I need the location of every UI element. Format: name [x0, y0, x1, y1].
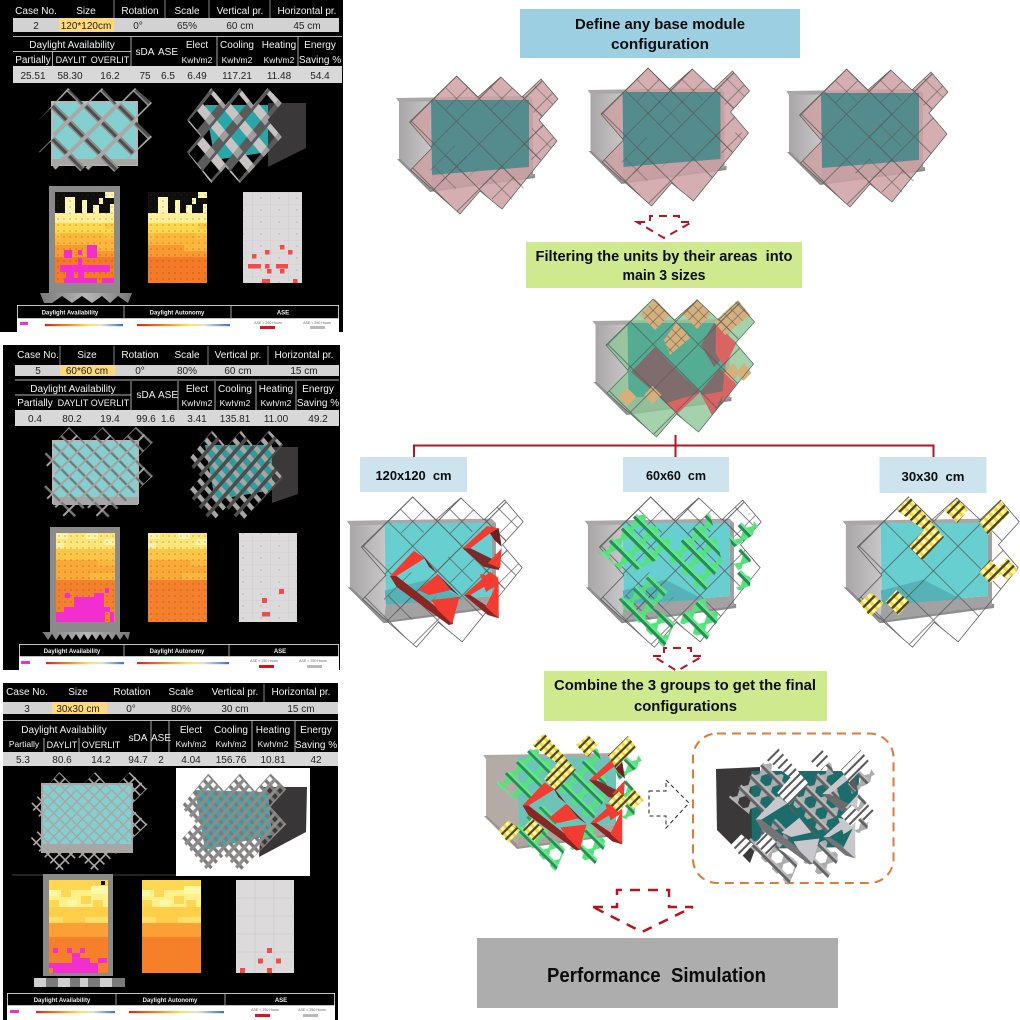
performance table: case 5: ASE: [158, 390, 178, 401]
legend: ASE > 250 Hours: [254, 321, 282, 325]
parameter table: case 3: Vertical pr.: [212, 687, 258, 698]
arrow: black dashed right: [649, 780, 689, 828]
parameter table: case 2: 0°: [133, 21, 143, 32]
performance table: case 3: sDA: [129, 733, 148, 744]
performance table: case 2: OVERLIT: [91, 55, 130, 65]
legend: ASE < 250 Hours: [298, 1008, 326, 1012]
performance table: case 5: 99.6: [136, 414, 156, 425]
performance table: case 3: Partially: [9, 739, 40, 749]
daylight autonomy map: [148, 533, 207, 622]
performance table: case 2: 6.5: [161, 71, 175, 82]
parameter table: case 5: Horizontal pr.: [275, 350, 333, 361]
ASE map: [236, 880, 294, 973]
legend: ASE: [277, 310, 289, 316]
label: 30x30 cm: [880, 457, 986, 493]
performance table: case 5: Kwh/m2: [261, 398, 292, 408]
performance table: case 3: Kwh/m2: [216, 739, 247, 749]
performance table: case 5: Kwh/m2: [182, 398, 213, 408]
performance table: case 2: Cooling: [220, 40, 254, 51]
parameter table: case 2: Size: [76, 6, 96, 17]
performance table: case 3: ASE: [151, 733, 171, 744]
performance table: case 2: 11.48: [267, 71, 292, 82]
performance table: case 3: Elect: [180, 725, 202, 736]
parameter table: case 5: 5: [35, 366, 41, 377]
parameter table: case 2: 65%: [177, 21, 197, 32]
performance table: case 5: Kwh/m2: [220, 398, 251, 408]
heading: combine groups: Combine the 3 groups to get the final: [554, 678, 816, 694]
parameter table: case 5: 80%: [177, 366, 197, 377]
performance table: case 2: 25.51: [20, 71, 46, 82]
performance table: case 3: 94.7: [128, 755, 148, 766]
performance table: case 5: DAYLIT: [58, 398, 89, 408]
parameter table: case 2: Case No.: [15, 6, 57, 17]
daylight availability map: [42, 527, 130, 640]
performance table: case 3: Daylight Availability: [21, 725, 107, 736]
parameter table: case 2: 60 cm: [226, 21, 254, 32]
performance table: case 5: 49.2: [308, 414, 328, 425]
unit group: 120x120 in red: [347, 497, 523, 647]
arrow: dashed down 1: [637, 216, 692, 238]
connector: red tree: [414, 435, 934, 457]
performance table: case 2: DAYLIT: [56, 55, 87, 65]
legend: ASE < 250 Hours: [299, 659, 327, 663]
heading: define base module: [520, 9, 800, 58]
performance table: case 5: 3.41: [187, 414, 207, 425]
final configuration: dashed frame and render: [693, 734, 894, 886]
performance table: case 2: Kwh/m2: [182, 55, 213, 65]
performance table: case 5: 11.00: [264, 414, 289, 425]
performance table: case 3: 80.6: [52, 755, 72, 766]
parameter table: case 3: 30 cm: [221, 704, 249, 715]
label: 30x30 cm: 30x30 cm: [902, 469, 964, 484]
performance table: case 2: [13, 36, 342, 83]
performance table: case 3: [3, 720, 338, 766]
performance table: case 3: Kwh/m2: [176, 739, 207, 749]
base module configuration 3: [786, 69, 948, 207]
performance table: case 2: 117.21: [222, 71, 252, 82]
parameter table: case 5: Rotation: [121, 350, 159, 361]
performance table: case 3: Kwh/m2: [258, 739, 289, 749]
label: 60x60 cm: 60x60 cm: [646, 468, 706, 483]
heading: filtering units: main 3 sizes: [622, 268, 706, 284]
performance table: case 5: Cooling: [218, 384, 252, 395]
unit group: 60x60 in green: [585, 497, 761, 648]
parameter table: case 2: Horizontal pr.: [278, 6, 336, 17]
parameter table: case 5: 60*60 cm: [66, 366, 108, 377]
legend: ASE > 250 Hours: [251, 1008, 279, 1012]
parameter table: case 3: Rotation: [113, 687, 151, 698]
performance table: case 3: OVERLIT: [82, 740, 121, 750]
performance table: case 2: sDA: [136, 47, 155, 58]
heading: filtering units: Filtering the units by their areas into: [536, 249, 793, 265]
performance table: case 5: 80.2: [62, 414, 82, 425]
performance table: case 3: 42: [310, 755, 322, 766]
performance table: case 5: Energy: [302, 384, 334, 395]
heading: filtering units: [526, 242, 802, 288]
parameter table: case 5: 0°: [135, 366, 145, 377]
perspective view: 120 cm lattice: [187, 88, 306, 183]
parameter table: case 2: Scale: [174, 6, 200, 17]
heading: define base module: Define any base module: [575, 16, 745, 33]
parameter table: case 5: [15, 346, 339, 377]
legend: ASE: [275, 998, 287, 1004]
legend: Daylight Autonomy: [143, 998, 198, 1004]
parameter table: case 3: Horizontal pr.: [272, 687, 330, 698]
parameter table: case 2: 45 cm: [293, 21, 321, 32]
parameter table: case 2: 120*120cm: [61, 21, 111, 32]
performance table: case 5: Saving %: [297, 398, 339, 409]
performance table: case 3: Cooling: [214, 725, 248, 736]
legend: Daylight Autonomy: [150, 649, 205, 655]
heading: performance simulation: [477, 938, 838, 1008]
parameter table: case 3: 15 cm: [287, 704, 315, 715]
performance table: case 2: Kwh/m2: [222, 55, 253, 65]
parameter table: case 3: 30x30 cm: [56, 704, 100, 715]
parameter table: case 3: Case No.: [6, 687, 48, 698]
parameter table: case 3: [3, 684, 338, 715]
label: 120x120 cm: 120x120 cm: [376, 468, 452, 483]
combined coloured configuration: [483, 733, 644, 872]
performance table: case 5: sDA: [137, 390, 156, 401]
perspective view: 60 cm lattice: [187, 430, 298, 523]
performance table: case 3: 10.81: [260, 755, 286, 766]
performance table: case 2: ASE: [158, 47, 178, 58]
parameter table: case 5: 15 cm: [290, 366, 318, 377]
performance table: case 3: 2: [158, 755, 164, 766]
legend: [19, 644, 339, 670]
heading: combine groups: [544, 671, 827, 721]
arrow: dashed down 2: [653, 648, 703, 671]
label: 60x60 cm: [623, 457, 729, 492]
legend: Daylight Availability: [44, 649, 101, 655]
parameter table: case 5: Case No.: [17, 350, 59, 361]
performance table: case 5: [15, 380, 339, 426]
front view: 30 cm lattice: [29, 772, 148, 873]
performance table: case 2: Elect: [186, 40, 208, 51]
parameter table: case 5: 60 cm: [224, 366, 252, 377]
panel: case 3 results: [3, 683, 338, 1020]
legend: ASE: [274, 649, 286, 655]
legend: Daylight Availability: [42, 310, 99, 316]
panel: case 5 results: [3, 345, 340, 670]
performance table: case 2: 6.49: [187, 71, 207, 82]
performance table: case 3: 14.2: [91, 755, 111, 766]
performance table: case 2: Energy: [304, 40, 336, 51]
performance table: case 2: Kwh/m2: [264, 55, 295, 65]
daylight autonomy map: [148, 192, 207, 283]
ASE map: [243, 192, 302, 283]
performance table: case 2: Heating: [262, 40, 296, 51]
parameter table: case 3: Scale: [168, 687, 194, 698]
arrow: dashed down 3: [593, 890, 693, 932]
legend: Daylight Autonomy: [150, 310, 205, 316]
performance table: case 5: 0.4: [28, 414, 42, 425]
parameter table: case 3: Size: [68, 687, 88, 698]
parameter table: case 2: Rotation: [121, 6, 159, 17]
performance table: case 2: 16.2: [100, 71, 120, 82]
performance table: case 5: Elect: [186, 384, 208, 395]
panel: case 2 results: [0, 0, 343, 332]
performance table: case 5: 19.4: [100, 414, 120, 425]
performance table: case 5: Heating: [259, 384, 293, 395]
performance table: case 3: 156.76: [216, 755, 247, 766]
label: 120x120 cm: [360, 457, 467, 492]
heading: define base module: configuration: [611, 36, 709, 53]
performance table: case 5: 135.81: [220, 414, 251, 425]
performance table: case 3: Energy: [300, 725, 332, 736]
performance table: case 3: DAYLIT: [47, 740, 78, 750]
performance table: case 2: Saving %: [299, 55, 341, 66]
performance table: case 5: 1.6: [161, 414, 175, 425]
parameter table: case 2: 2: [33, 21, 39, 32]
parameter table: case 3: 0°: [126, 704, 136, 715]
parameter table: case 5: Vertical pr.: [215, 350, 261, 361]
parameter table: case 5: Size: [77, 350, 97, 361]
ASE map: [239, 533, 297, 622]
performance table: case 3: 4.04: [181, 755, 201, 766]
performance table: case 2: 54.4: [310, 71, 330, 82]
legend: [7, 993, 335, 1020]
daylight availability map: [34, 874, 125, 987]
parameter table: case 3: 3: [24, 704, 30, 715]
performance table: case 5: Partially: [17, 398, 53, 409]
daylight autonomy map: [142, 880, 201, 973]
performance table: case 2: Daylight Availability: [29, 40, 115, 51]
performance table: case 3: Heating: [256, 725, 290, 736]
classified module: filtered by area: [592, 299, 754, 437]
legend: ASE > 250 Hours: [250, 659, 278, 663]
parameter table: case 2: Vertical pr.: [217, 6, 263, 17]
performance table: case 2: Partially: [15, 55, 51, 66]
performance table: case 2: 75: [139, 71, 151, 82]
heading: performance simulation: Performance Simulation: [547, 965, 766, 987]
legend: [17, 305, 339, 332]
performance table: case 3: 5.3: [16, 755, 30, 766]
parameter table: case 2: [13, 0, 339, 32]
perspective view: 30 cm lattice on white: [176, 768, 310, 876]
legend: Daylight Availability: [34, 998, 91, 1004]
heading: combine groups: configurations: [634, 699, 737, 715]
divider line: [12, 874, 176, 876]
base module configuration 2: [588, 68, 750, 206]
front view: 120 cm lattice: [39, 88, 152, 183]
base module configuration 1: [396, 76, 558, 214]
performance table: case 5: Daylight Availability: [30, 384, 116, 395]
legend: ASE < 250 Hours: [303, 321, 331, 325]
performance table: case 2: 58.30: [57, 71, 83, 82]
performance table: case 5: OVERLIT: [91, 398, 130, 408]
parameter table: case 5: Scale: [174, 350, 200, 361]
front view: 60 cm lattice: [40, 427, 153, 522]
performance table: case 3: Saving %: [295, 740, 337, 751]
daylight availability map: [40, 186, 132, 303]
parameter table: case 3: 80%: [171, 704, 191, 715]
unit group: 30x30 in yellow: [843, 497, 1019, 647]
